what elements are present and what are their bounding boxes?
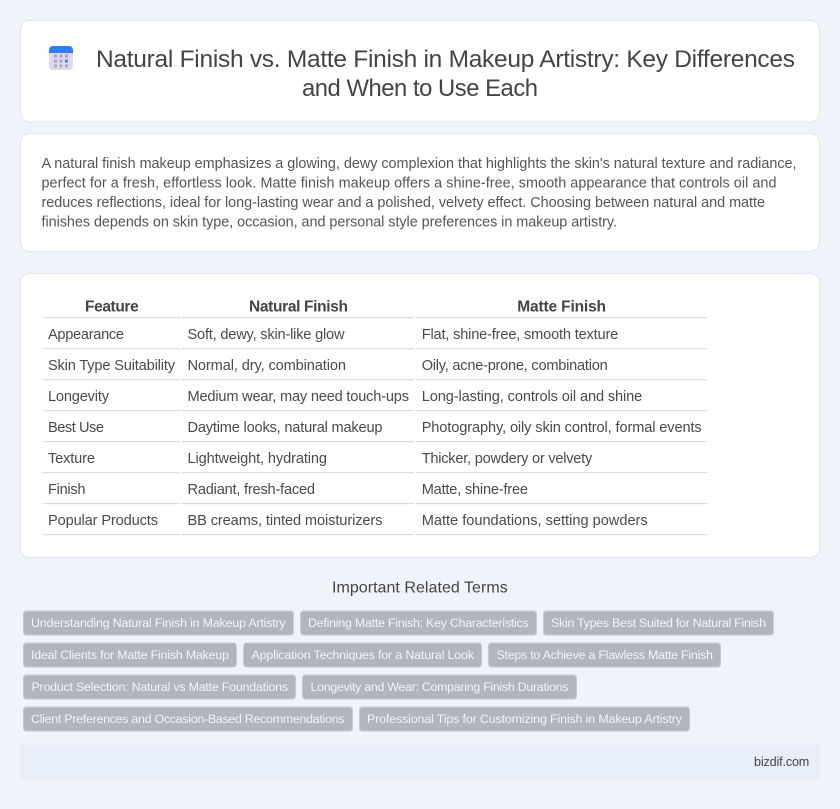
tag: skin types: Skin Types Best Suited for Natural Finish xyxy=(551,616,766,630)
tag: product selection: Product Selection: Natural vs Matte Foundations xyxy=(32,680,288,694)
tag: product selection xyxy=(24,675,296,699)
tag: client preferences xyxy=(24,707,352,731)
row: appearance: Flat, shine-free, smooth texture xyxy=(422,327,618,343)
row: longevity: Long-lasting, controls oil and shine xyxy=(422,389,642,405)
row: finish xyxy=(43,482,707,504)
row: popular products: BB creams, tinted moisturizers xyxy=(188,513,382,529)
row: texture xyxy=(43,451,707,473)
row: finish: Matte, shine-free xyxy=(422,482,528,498)
tag: ideal clients: Ideal Clients for Matte Finish Makeup xyxy=(31,648,229,662)
intro paragraph xyxy=(42,156,796,230)
row: best use: Photography, oily skin control, formal events xyxy=(422,420,702,436)
intro paragraph: reduces reflections, ideal for long-lasting wear and a polished, velvety effect. Choosing between natural and matte xyxy=(42,195,765,211)
tag: application techniques: Application Techniques for a Natural Look xyxy=(252,648,475,662)
tag: ideal clients xyxy=(24,643,236,667)
heading: important related terms: Important Related Terms xyxy=(332,580,508,596)
row: best use: Best Use xyxy=(48,420,104,436)
panel: introduction text xyxy=(20,134,820,252)
row: finish: Finish xyxy=(48,482,86,498)
row: best use xyxy=(43,420,707,442)
intro paragraph: perfect for a fresh, effortless look. Matte finish makeup offers a shine-free, smooth appearance that controls oil and xyxy=(42,176,776,192)
intro paragraph: A natural finish makeup emphasizes a glowing, dewy complexion that highlights the skin's natural texture and radiance, xyxy=(42,156,796,172)
table header row: Feature xyxy=(85,298,139,316)
row: best use: Daytime looks, natural makeup xyxy=(188,420,382,436)
row: longevity: Longevity xyxy=(48,389,110,405)
tag: skin types xyxy=(544,611,774,635)
footer bar xyxy=(20,745,820,779)
row: appearance: Appearance xyxy=(48,327,124,343)
row: finish: Radiant, fresh-faced xyxy=(188,482,315,498)
tag: understanding natural finish: Understanding Natural Finish in Makeup Artistry xyxy=(31,616,286,630)
footer site name: bizdif.com xyxy=(754,755,809,769)
tag: flawless matte steps: Steps to Achieve a Flawless Matte Finish xyxy=(496,648,713,662)
table header row xyxy=(43,298,707,318)
title xyxy=(96,46,795,102)
row: appearance: Soft, dewy, skin-like glow xyxy=(188,327,345,343)
row: skin type suitability: Skin Type Suitability xyxy=(48,358,176,374)
tag: defining matte finish: Defining Matte Finish: Key Characteristics xyxy=(308,616,529,630)
row: texture: Texture xyxy=(48,451,95,467)
intro paragraph: finishes depends on skin type, occasion, and personal style preferences in makeup artistry. xyxy=(42,214,617,230)
tag: application techniques xyxy=(244,643,482,667)
tag: defining matte finish xyxy=(300,611,536,635)
table header row: Matte Finish xyxy=(517,298,606,316)
row: skin type suitability xyxy=(43,358,707,380)
icon: calendar xyxy=(49,46,73,70)
table header row: Natural Finish xyxy=(249,298,348,316)
row: texture: Lightweight, hydrating xyxy=(188,451,327,467)
row: longevity: Medium wear, may need touch-ups xyxy=(188,389,409,405)
tag: flawless matte steps xyxy=(488,643,720,667)
tag: longevity and wear xyxy=(302,675,576,699)
related term tags xyxy=(24,611,774,731)
tag: understanding natural finish xyxy=(24,611,294,635)
row: skin type suitability: Oily, acne-prone, combination xyxy=(422,358,608,374)
tag: professional tips xyxy=(360,707,690,731)
row: popular products: Popular Products xyxy=(48,513,158,529)
tag: longevity and wear: Longevity and Wear: Comparing Finish Durations xyxy=(310,680,568,694)
title: Natural Finish vs. Matte Finish in Makeup Artistry: Key Differences xyxy=(96,46,795,73)
row: popular products xyxy=(43,513,707,535)
panel: comparison table xyxy=(20,274,820,558)
tag: professional tips: Professional Tips for Customizing Finish in Makeup Artistry xyxy=(367,712,683,726)
row: skin type suitability: Normal, dry, combination xyxy=(188,358,346,374)
row: appearance xyxy=(43,327,707,349)
row: popular products: Matte foundations, setting powders xyxy=(422,513,648,529)
panel: header xyxy=(20,20,820,122)
tag: client preferences: Client Preferences and Occasion-Based Recommendations xyxy=(31,712,344,726)
row: longevity xyxy=(43,389,707,411)
title: and When to Use Each xyxy=(302,75,538,102)
row: texture: Thicker, powdery or velvety xyxy=(422,451,593,467)
